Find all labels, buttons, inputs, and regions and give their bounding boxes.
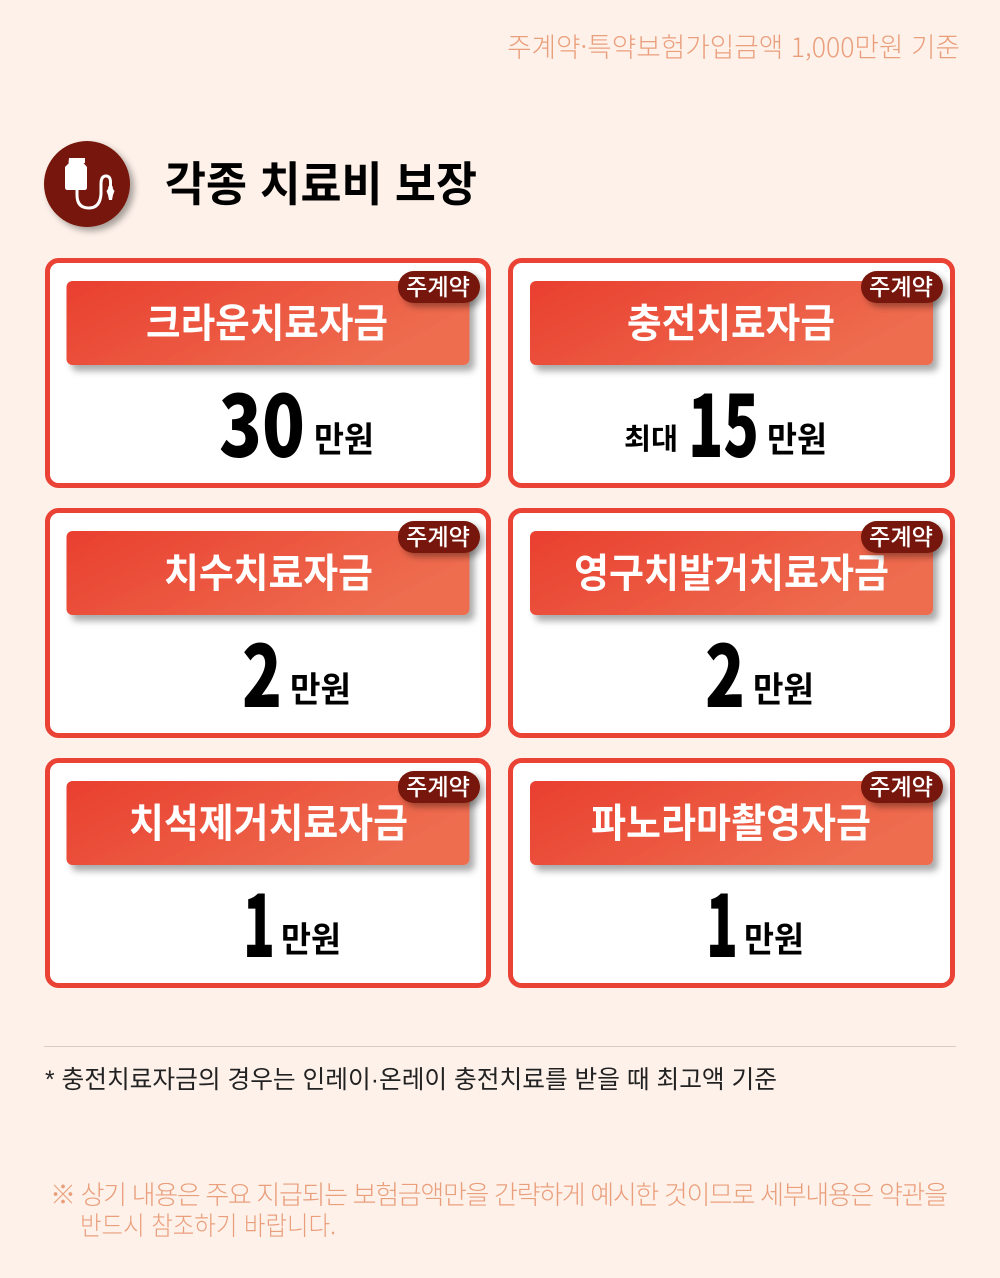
panel: 크라운치료자금: 만원 xyxy=(314,421,374,460)
panel: 파노라마촬영자금 xyxy=(510,760,952,986)
panel: 치석제거치료자금: 주계약 xyxy=(406,774,470,800)
panel: 파노라마촬영자금: 주계약 xyxy=(869,774,933,800)
panel: 치수치료자금: 치수치료자금 xyxy=(164,552,373,596)
disclaimer xyxy=(50,1175,948,1243)
panel: 충전치료자금: 최대 xyxy=(624,423,678,456)
panel: 치석제거치료자금 xyxy=(48,760,488,986)
disclaimer: ※ 상기 내용은 주요 지급되는 보험금액만을 간략하게 예시한 것이므로 세부내용은 약관을 xyxy=(50,1175,948,1212)
panel: 영구치발거치료자금: 2 xyxy=(705,609,745,732)
panel: 크라운치료자금: 30 xyxy=(219,359,305,482)
panel: 치수치료자금: 만원 xyxy=(290,671,351,710)
disclaimer: 반드시 참조하기 바랍니다. xyxy=(80,1206,336,1243)
panel: 충전치료자금: 15 xyxy=(688,359,759,482)
panel: 치수치료자금: 주계약 xyxy=(406,524,470,550)
panel: 파노라마촬영자금: 1 xyxy=(706,859,738,982)
panel: 파노라마촬영자금: 만원 xyxy=(744,921,804,960)
panel: 파노라마촬영자금: 파노라마촬영자금 xyxy=(591,802,871,846)
panel: 치석제거치료자금: 치석제거치료자금 xyxy=(129,802,408,846)
panel: 충전치료자금: 만원 xyxy=(767,421,827,460)
panel: 영구치발거치료자금: 영구치발거치료자금 xyxy=(574,552,889,596)
panel: 크라운치료자금: 주계약 xyxy=(406,274,470,300)
panel: 충전치료자금: 충전치료자금 xyxy=(627,302,835,346)
title: 각종 치료비 보장 xyxy=(165,158,477,211)
panel: 크라운치료자금: 크라운치료자금 xyxy=(146,302,388,346)
panel: 치수치료자금: 2 xyxy=(242,609,282,732)
panel: 크라운치료자금 xyxy=(48,260,488,486)
panel: 치석제거치료자금: 1 xyxy=(243,859,275,982)
icon: IV drip bag xyxy=(44,141,130,227)
panel: 영구치발거치료자금 xyxy=(510,510,952,736)
panel: 충전치료자금: 주계약 xyxy=(869,274,933,300)
panel: 영구치발거치료자금: 주계약 xyxy=(869,524,933,550)
basis note: 주계약·특약보험가입금액 1,000만원 기준 xyxy=(507,26,960,65)
panel: 영구치발거치료자금: 만원 xyxy=(753,671,814,710)
footnote: * 충전치료자금의 경우는 인레이·온레이 충전치료를 받을 때 최고액 기준 xyxy=(45,1066,777,1094)
panel: 치수치료자금 xyxy=(48,510,488,736)
panel: 치석제거치료자금: 만원 xyxy=(281,921,341,960)
panel: 충전치료자금 xyxy=(510,260,952,486)
